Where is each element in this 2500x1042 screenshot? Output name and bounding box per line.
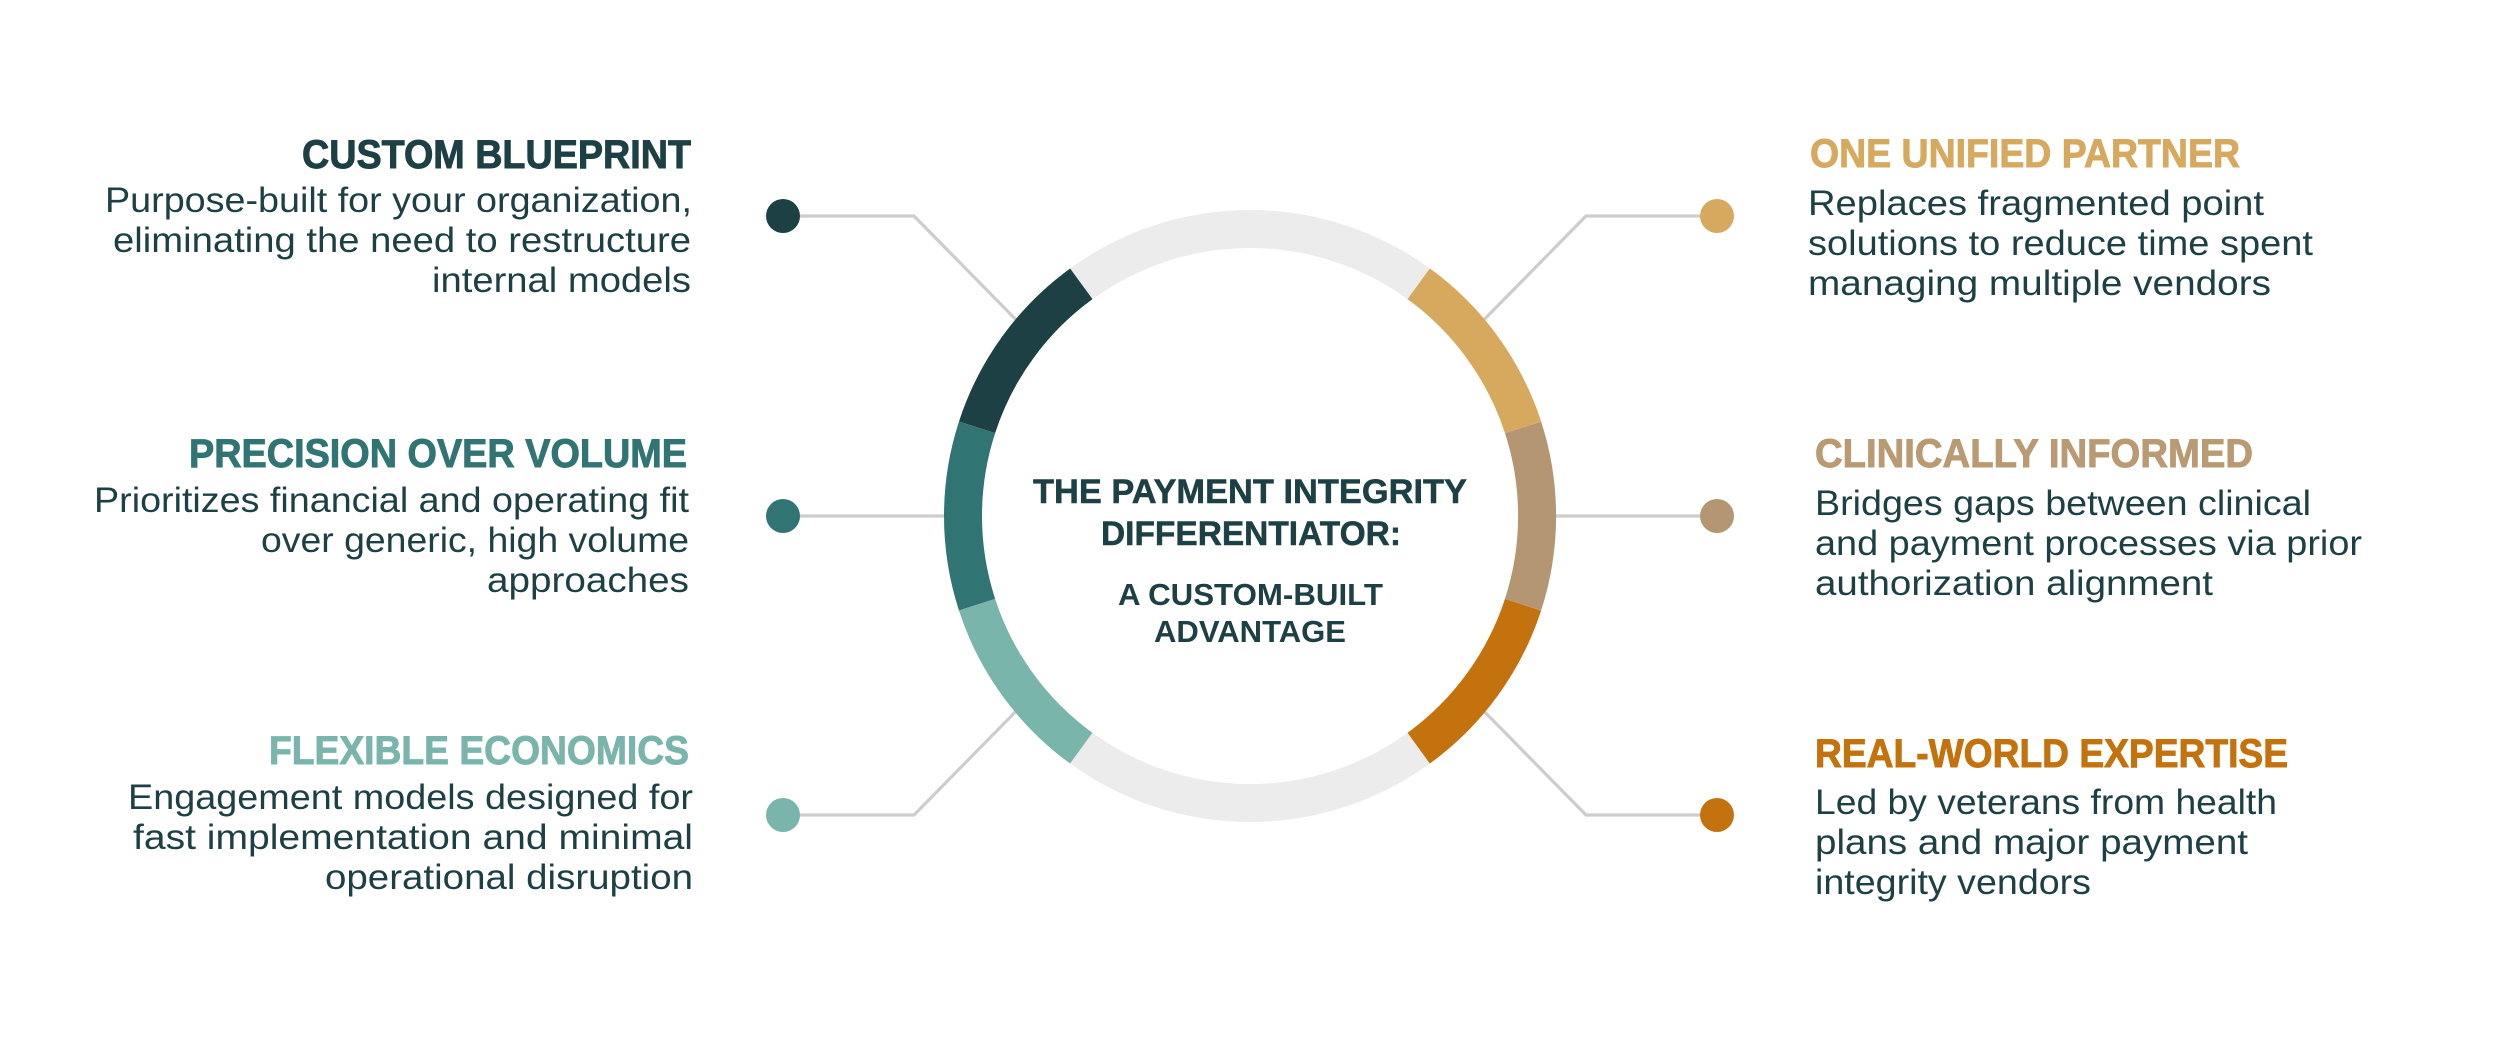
ring segment: real-world expertise — [1419, 605, 1523, 748]
dot: flexible economics — [766, 798, 800, 832]
ring segment: precision over volume — [963, 427, 977, 605]
text: real-world expertise description — [1815, 783, 2277, 902]
panel: precision over volume — [94, 432, 689, 600]
text: flexible economics description — [128, 778, 693, 897]
center subheading: A CUSTOM-BUILT — [1118, 577, 1383, 612]
text: real-world expertise description: plans and major payment — [1815, 823, 2248, 862]
text: custom blueprint description — [105, 181, 692, 300]
text: real-world expertise description: integrity vendors — [1815, 863, 2091, 902]
ring segment: one unified partner — [1419, 284, 1523, 427]
ring segment: flexible economics — [977, 605, 1081, 748]
heading: one unified partner: ONE UNIFIED PARTNER — [1810, 132, 2240, 176]
heading: flexible economics: FLEXIBLE ECONOMICS — [269, 729, 689, 773]
text: precision over volume description: over generic, high volume — [261, 521, 689, 560]
center heading — [1033, 473, 1467, 553]
panel: one unified partner — [1808, 132, 2313, 303]
center heading: THE PAYMENT INTEGRITY — [1033, 473, 1467, 511]
heading: real-world expertise: REAL-WORLD EXPERTISE — [1815, 732, 2288, 776]
dot: one unified partner — [1700, 199, 1734, 233]
text: one unified partner description: Replaces fragmented point — [1808, 184, 2264, 223]
text: one unified partner description: managing multiple vendors — [1808, 264, 2271, 303]
ring segment: top gray — [1081, 229, 1419, 284]
text: precision over volume description — [94, 481, 689, 600]
text: clinically informed description: authorization alignment — [1815, 564, 2213, 603]
text: clinically informed description — [1815, 484, 2362, 603]
text: precision over volume description: Prioritizes financial and operating fit — [94, 481, 689, 520]
dot: custom blueprint — [766, 199, 800, 233]
dot: clinically informed — [1700, 499, 1734, 533]
center title — [1033, 473, 1467, 649]
panel: real-world expertise — [1815, 732, 2288, 902]
center heading: DIFFERENTIATOR: — [1101, 515, 1401, 553]
text: flexible economics description: fast implementation and minimal — [133, 818, 693, 857]
text: real-world expertise description: Led by veterans from health — [1815, 783, 2277, 822]
panel: clinically informed — [1815, 432, 2362, 603]
heading: custom blueprint: CUSTOM BLUEPRINT — [302, 133, 691, 177]
text: one unified partner description — [1808, 184, 2313, 303]
dot: real-world expertise — [1700, 798, 1734, 832]
text: custom blueprint description: internal models — [432, 261, 691, 300]
dot: precision over volume — [766, 499, 800, 533]
text: custom blueprint description: Purpose-built for your organization, — [105, 181, 692, 220]
central ring — [963, 229, 1537, 803]
ring segment: bottom gray — [1081, 748, 1419, 803]
panel: flexible economics — [128, 729, 693, 897]
center subheading: ADVANTAGE — [1154, 614, 1346, 649]
text: clinically informed description: Bridges gaps between clinical — [1815, 484, 2311, 523]
text: one unified partner description: solutions to reduce time spent — [1808, 224, 2313, 263]
ring segment: clinically informed — [1523, 427, 1537, 605]
text: clinically informed description: and payment processes via prior — [1815, 524, 2362, 563]
heading: clinically informed: CLINICALLY INFORMED — [1815, 432, 2253, 476]
text: flexible economics description: operational disruption — [325, 858, 693, 897]
heading: precision over volume: PRECISION OVER VOLUME — [189, 432, 687, 476]
text: precision over volume description: approaches — [487, 561, 689, 600]
text: custom blueprint description: eliminating the need to restructure — [113, 221, 691, 260]
panel: custom blueprint — [105, 133, 692, 300]
connector lines — [783, 216, 1717, 815]
center subheading — [1118, 577, 1383, 649]
text: flexible economics description: Engagement models designed for — [128, 778, 693, 817]
ring segment: custom blueprint — [977, 284, 1081, 427]
